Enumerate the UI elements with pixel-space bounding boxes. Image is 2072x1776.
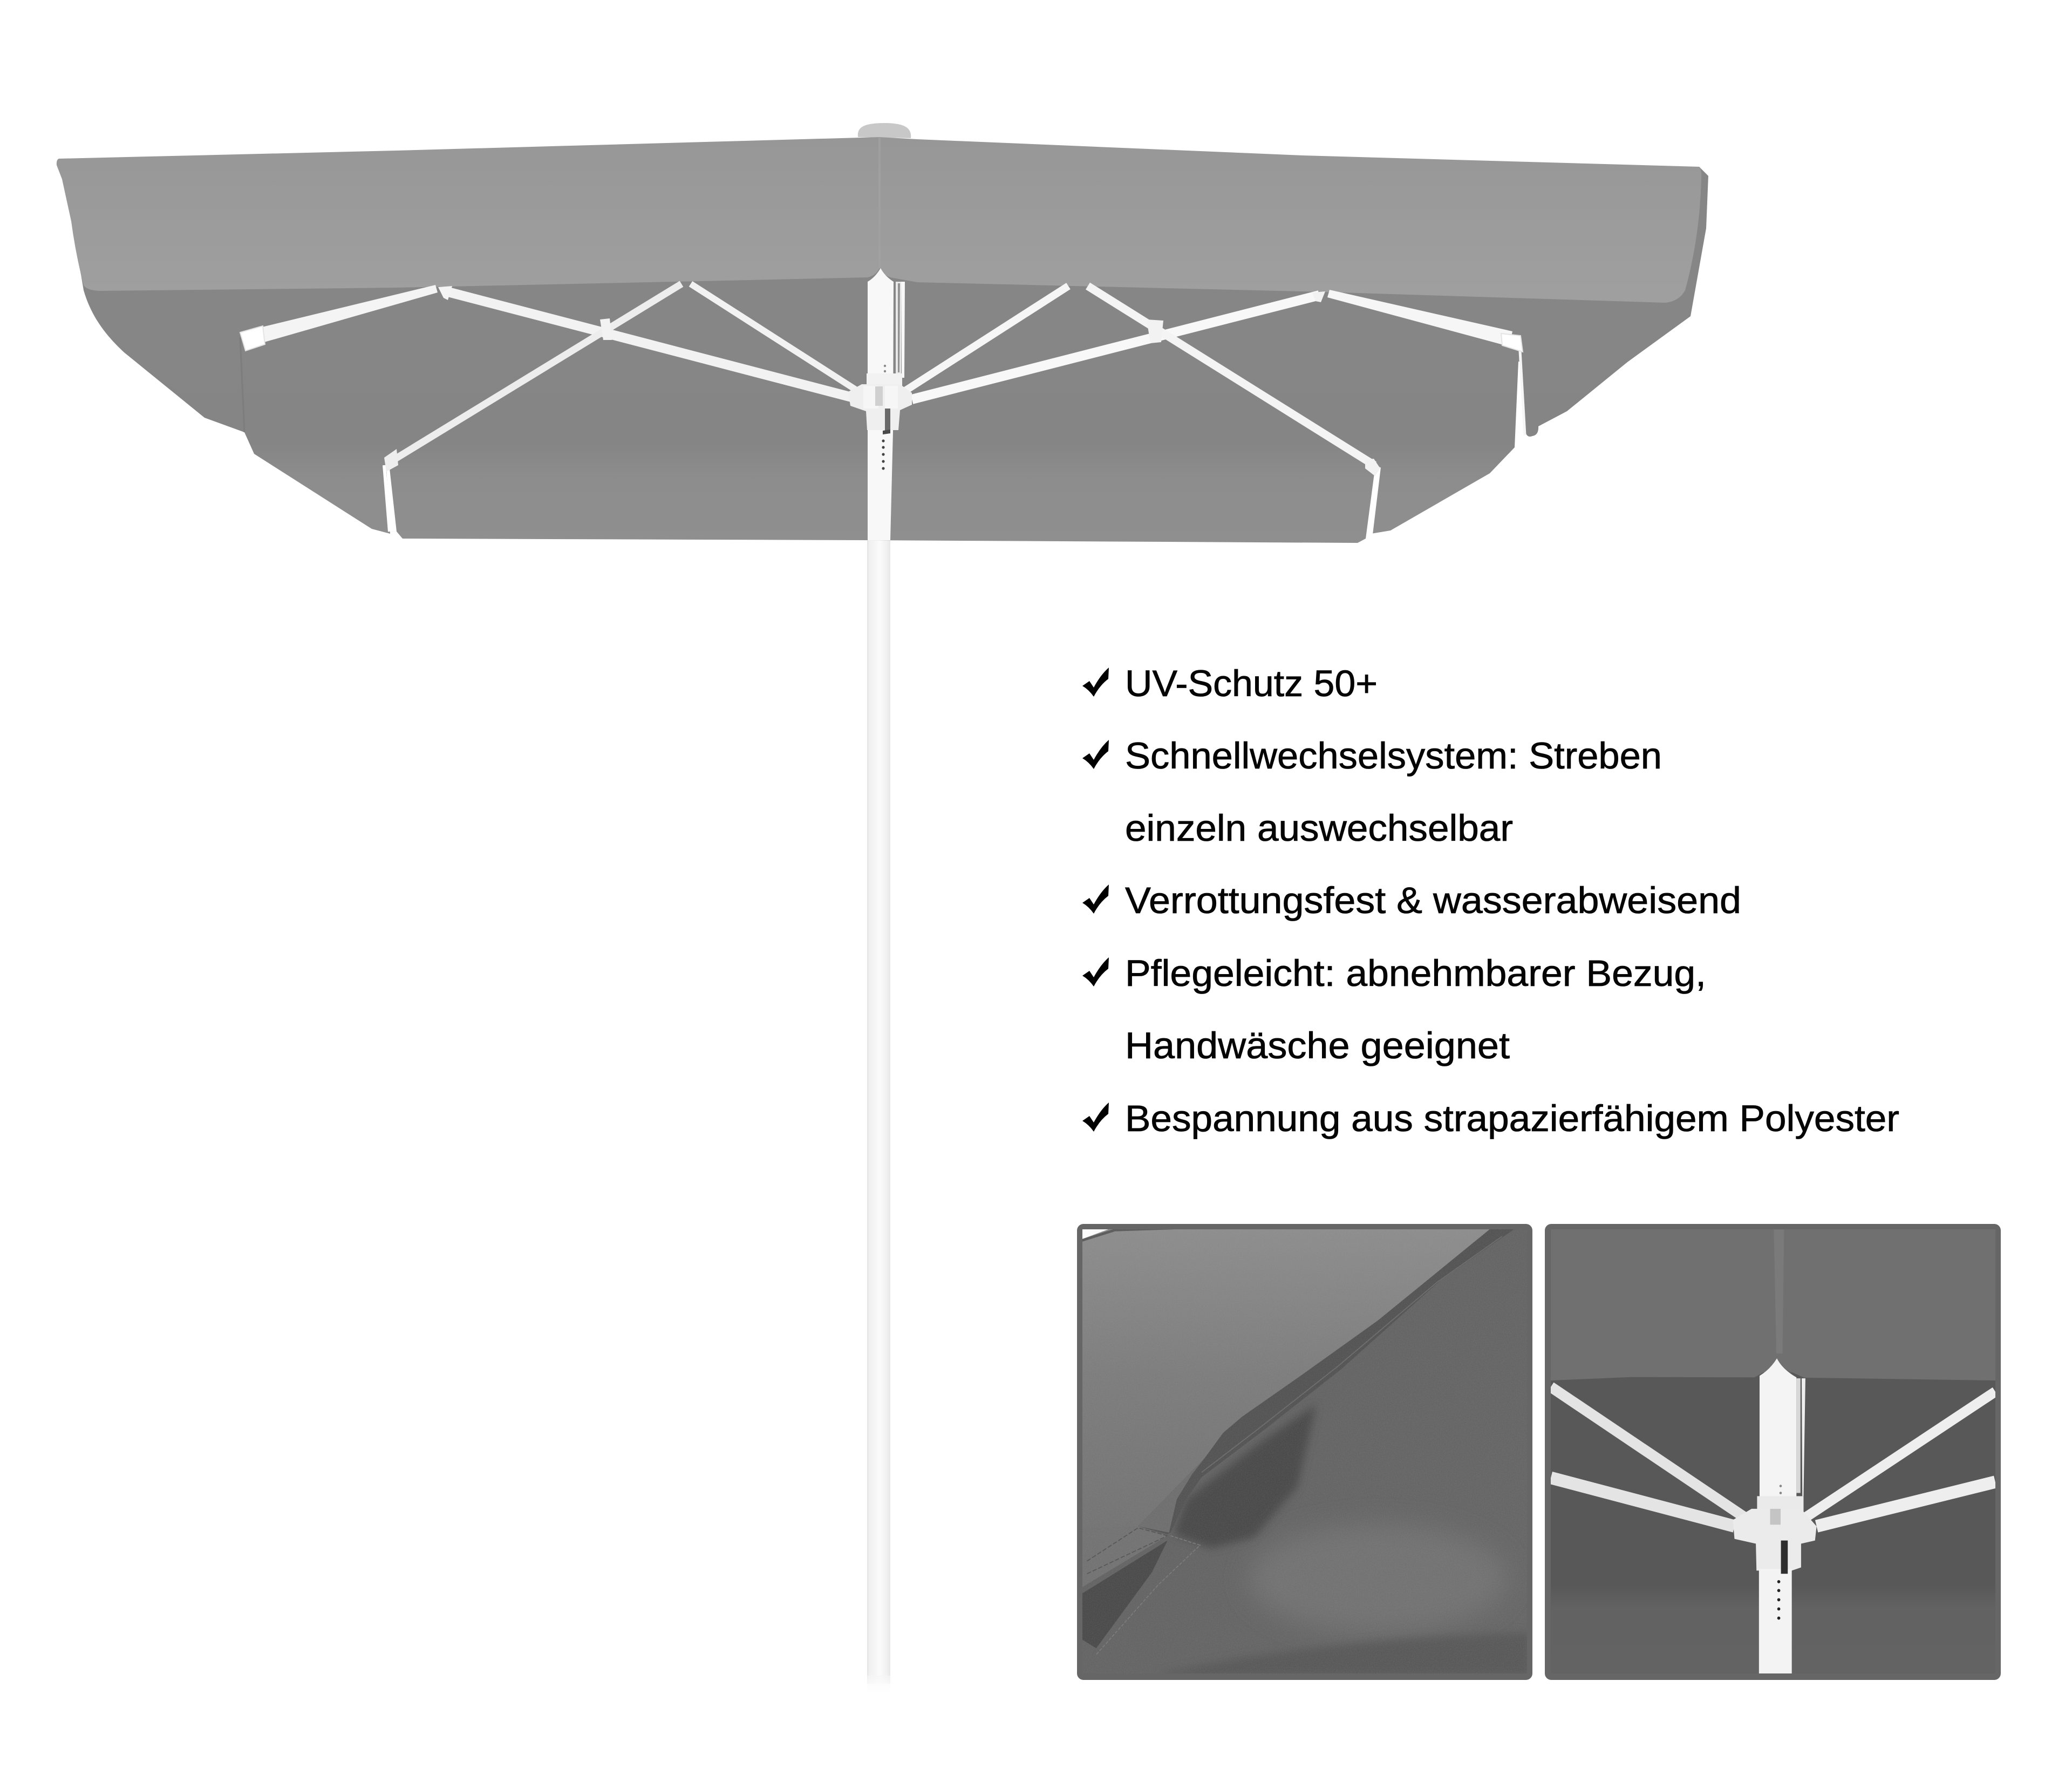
feature: Bespannung: Bespannung aus strapazierfähigem Polyester	[1125, 1098, 1899, 1139]
top cap	[858, 123, 911, 138]
feature: UV-Schutz: UV-Schutz 50+	[1125, 663, 1378, 704]
panel: fabric detail photo	[1077, 1224, 1532, 1680]
feature: Pflegeleicht: Handwäsche geeignet	[1125, 1025, 1510, 1066]
feature: Schnellwechselsystem	[1082, 735, 1662, 849]
left short rib with end cap	[240, 285, 438, 351]
pole head, hub and rope	[848, 268, 912, 540]
feature list	[1082, 663, 1899, 1139]
canopy underside and side flaps	[73, 162, 1708, 543]
feature: Schnellwechselsystem: einzeln auswechselbar	[1125, 807, 1513, 849]
hub close-up	[1550, 1227, 1999, 1677]
feature: Pflegeleicht	[1082, 952, 1706, 1066]
feature: Verrottungsfest: Verrottungsfest & wasserabweisend	[1125, 880, 1741, 921]
panel: frame hub detail photo	[1545, 1224, 2001, 1680]
canopy front valance	[57, 137, 1701, 303]
umbrella photo	[57, 123, 1708, 1695]
centre seam	[878, 138, 881, 268]
right main ribs	[903, 286, 1374, 465]
umbrella pole	[865, 540, 892, 1695]
frame struts	[240, 284, 1523, 476]
flap seams	[240, 337, 1525, 534]
feature: Schnellwechselsystem: Schnellwechselsystem: Streben	[1125, 735, 1662, 777]
feature: Pflegeleicht: Pflegeleicht: abnehmbarer Bezug,	[1125, 952, 1706, 994]
left main ribs	[384, 284, 859, 472]
fabric close-up	[1081, 1227, 1530, 1677]
right short rib with end cap	[1327, 290, 1523, 476]
